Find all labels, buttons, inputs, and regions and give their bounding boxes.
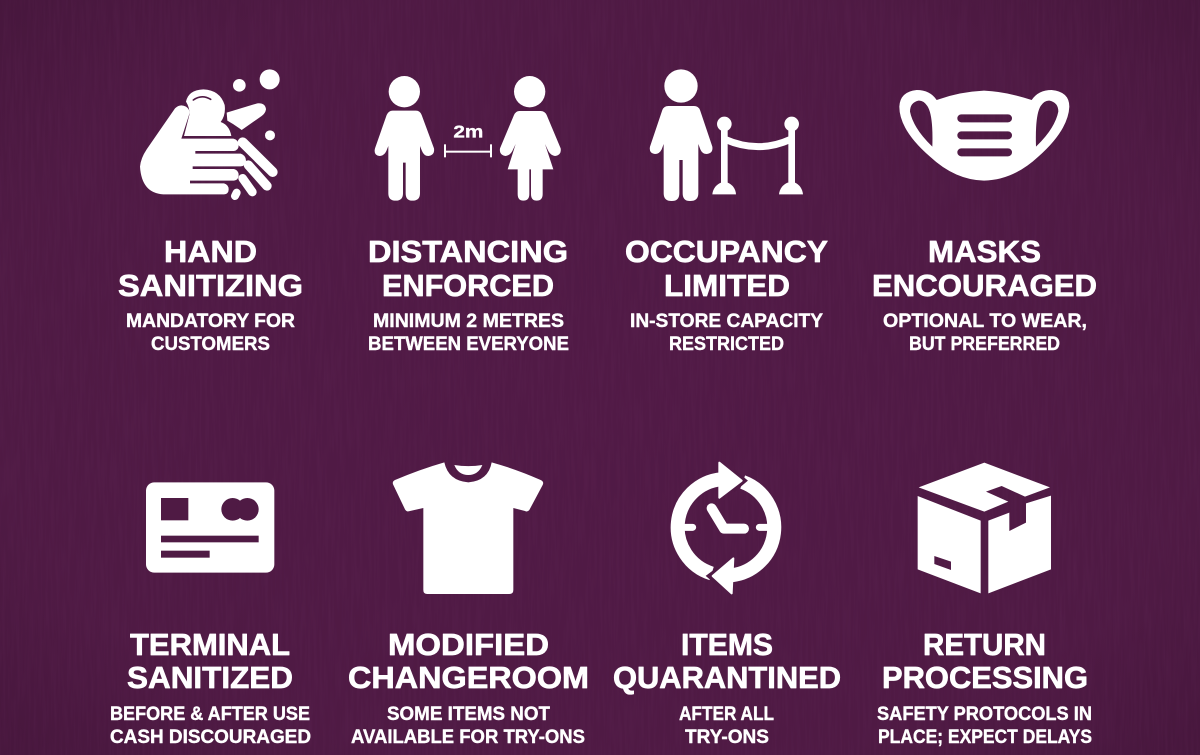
heading: hand sanitizing [118, 234, 303, 303]
text: changeroom detail [351, 704, 585, 748]
icon: washing hands [140, 69, 280, 196]
heading: terminal sanitized: SANITIZED [127, 660, 293, 695]
text: terminal detail: CASH DISCOURAGED [110, 727, 311, 748]
icon: two people 2m apart [375, 76, 561, 201]
icon: face mask [899, 90, 1069, 181]
text: changeroom detail: SOME ITEMS NOT [387, 704, 550, 725]
icon: two people 2m apart: 2m [453, 121, 483, 141]
panel: modified changeroom [348, 462, 589, 748]
heading: masks encouraged: MASKS [928, 234, 1041, 269]
text: masks detail: BUT PREFERRED [909, 334, 1060, 355]
panel: masks encouraged [872, 90, 1097, 355]
heading: occupancy limited: OCCUPANCY [625, 234, 828, 269]
heading: terminal sanitized: TERMINAL [130, 627, 290, 662]
heading: distancing enforced: ENFORCED [382, 268, 554, 303]
heading: hand sanitizing: SANITIZING [118, 268, 303, 303]
heading: return processing: PROCESSING [882, 660, 1088, 695]
panel: hand sanitizing [118, 69, 303, 355]
heading: occupancy limited: LIMITED [664, 268, 790, 303]
text: distancing detail: BETWEEN EVERYONE [368, 334, 569, 355]
icon: payment card [146, 482, 274, 573]
text: hand sanitizing detail: CUSTOMERS [151, 334, 270, 355]
text: occupancy detail: RESTRICTED [669, 334, 784, 355]
text: quarantine detail: TRY-ONS [685, 727, 769, 748]
icon: clock with circular arrows [678, 463, 774, 593]
text: return detail: SAFETY PROTOCOLS IN [877, 704, 1092, 725]
text: terminal detail [110, 704, 311, 748]
text: hand sanitizing detail: MANDATORY FOR [126, 311, 295, 332]
heading: terminal sanitized [127, 627, 293, 695]
panel: terminal sanitized [110, 482, 311, 748]
heading: return processing [882, 627, 1088, 695]
text: terminal detail: BEFORE & AFTER USE [110, 704, 310, 725]
text: return detail [877, 704, 1092, 748]
text: quarantine detail: AFTER ALL [679, 704, 774, 725]
text: distancing detail: MINIMUM 2 METRES [373, 311, 564, 332]
heading: items quarantined: QUARANTINED [613, 660, 841, 695]
text: changeroom detail: AVAILABLE FOR TRY-ONS [351, 727, 585, 748]
heading: masks encouraged: ENCOURAGED [872, 268, 1097, 303]
heading: hand sanitizing: HAND [164, 234, 257, 269]
heading: items quarantined: ITEMS [681, 627, 773, 662]
heading: distancing enforced [368, 234, 568, 303]
heading: modified changeroom: MODIFIED [388, 627, 549, 662]
text: return detail: PLACE; EXPECT DELAYS [878, 727, 1092, 748]
heading: items quarantined [613, 627, 841, 695]
text: masks detail [883, 311, 1087, 355]
icon: t-shirt [393, 462, 543, 594]
icon: cardboard box [918, 463, 1051, 593]
heading: modified changeroom: CHANGEROOM [348, 660, 589, 695]
text: occupancy detail [630, 311, 823, 355]
text: distancing detail [368, 311, 569, 355]
text: masks detail: OPTIONAL TO WEAR, [883, 311, 1087, 332]
panel: return processing [877, 463, 1092, 748]
heading: masks encouraged [872, 234, 1097, 303]
heading: distancing enforced: DISTANCING [368, 234, 568, 269]
panel: items quarantined [613, 463, 841, 748]
panel: occupancy limited [625, 69, 828, 355]
heading: modified changeroom [348, 627, 589, 695]
text: occupancy detail: IN-STORE CAPACITY [630, 311, 823, 332]
text: hand sanitizing detail [126, 311, 295, 355]
icon: person beside rope barrier [650, 69, 803, 201]
heading: occupancy limited [625, 234, 828, 303]
heading: return processing: RETURN [923, 627, 1046, 662]
text: quarantine detail [679, 704, 774, 748]
panel: distancing enforced [368, 76, 569, 355]
